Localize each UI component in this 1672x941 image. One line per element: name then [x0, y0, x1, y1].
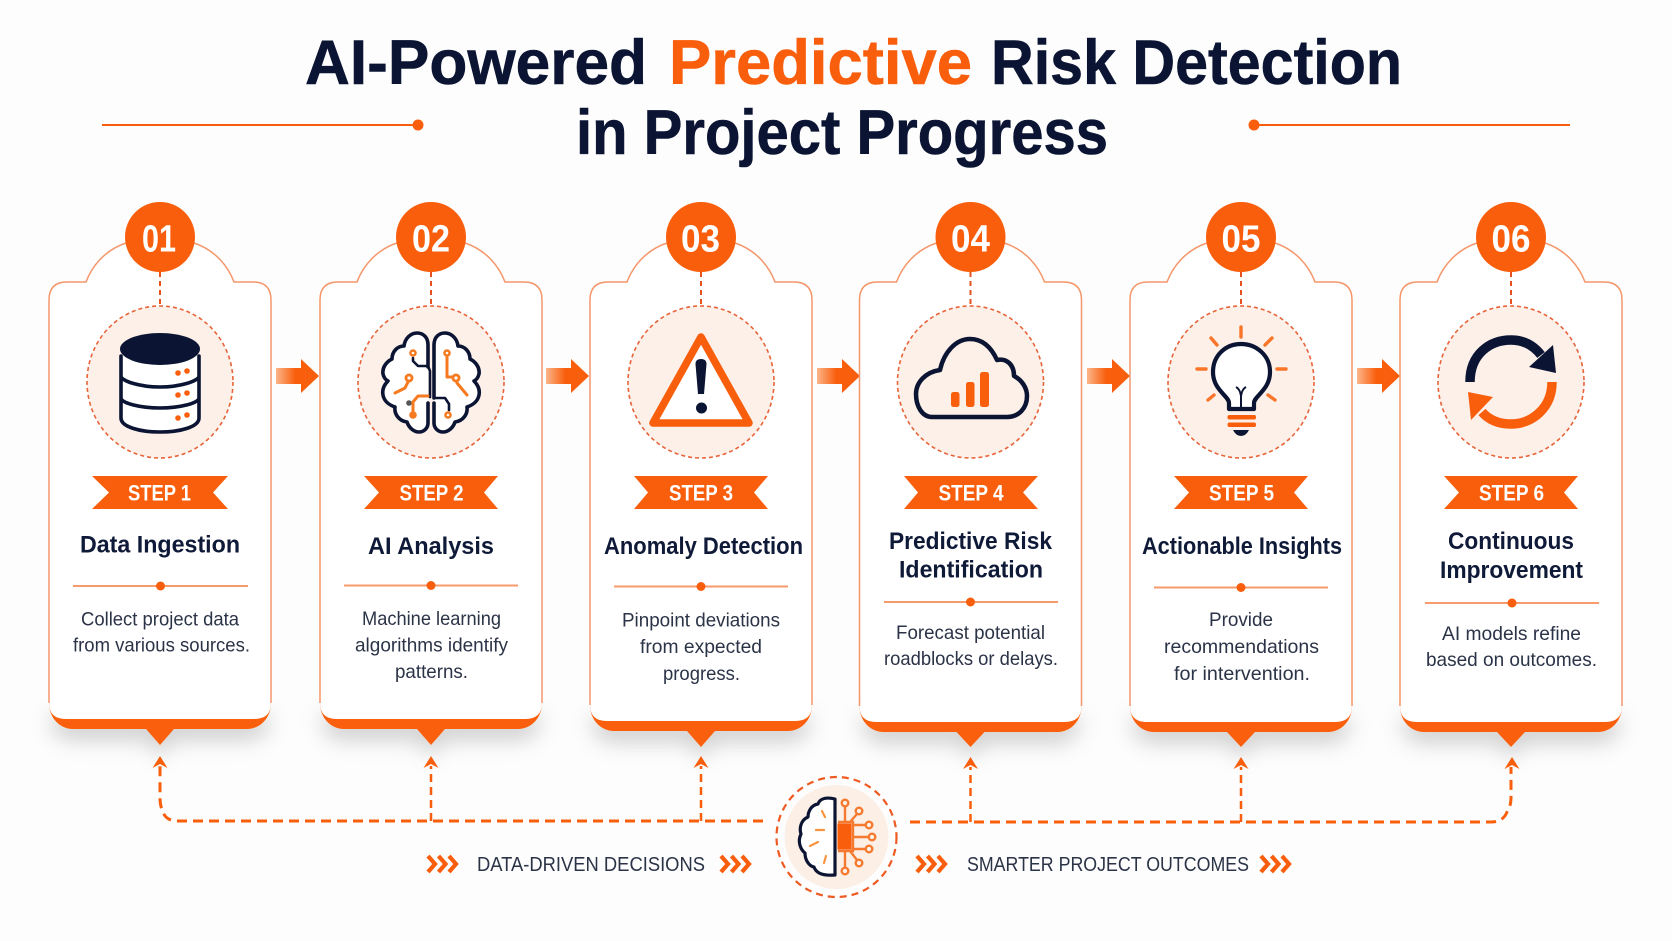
- description: [73, 608, 250, 656]
- label: smarter project outcomes: SMARTER PROJECT OUTCOMES: [967, 854, 1249, 876]
- icon: database: [87, 306, 233, 458]
- number badge 02: [396, 202, 466, 272]
- heading: Improvement: [1440, 557, 1583, 584]
- ribbon step 5: [1174, 476, 1308, 509]
- ribbon step 2: [364, 476, 498, 509]
- description: Pinpoint deviations: [622, 610, 780, 632]
- heading: [889, 528, 1052, 584]
- arrow 2 to 3: [546, 359, 589, 393]
- description: roadblocks or delays.: [884, 648, 1058, 670]
- description: progress.: [663, 663, 740, 685]
- description: [884, 622, 1058, 670]
- number badge 05: [1206, 202, 1276, 272]
- arrow 1 to 2: [276, 359, 319, 393]
- ribbon step 3: [634, 476, 768, 509]
- arrow 4 to 5: [1087, 359, 1130, 393]
- ribbon step 1: STEP 1: [128, 480, 191, 506]
- description: Forecast potential: [896, 622, 1045, 644]
- number badge 03: 03: [681, 218, 720, 260]
- ribbon step 1: [92, 476, 228, 509]
- icon: light bulb: [1168, 306, 1314, 458]
- heading: Continuous: [1448, 528, 1574, 555]
- icon: warning triangle: [628, 306, 774, 458]
- description: patterns.: [395, 661, 468, 683]
- number badge 01: [125, 202, 195, 272]
- title: [305, 28, 1402, 168]
- description: from various sources.: [73, 634, 250, 656]
- heading: Data Ingestion: [80, 532, 240, 558]
- heading: Actionable Insights: [1142, 533, 1342, 560]
- icon: brain: [358, 306, 504, 458]
- title: Predictive: [669, 28, 972, 98]
- panel: step 2 ai analysis: [320, 202, 542, 745]
- heading: AI Analysis: [368, 533, 494, 560]
- number badge 04: [936, 202, 1006, 272]
- ribbon step 4: STEP 4: [938, 480, 1004, 506]
- panel: step 4 predictive risk identification: [860, 202, 1082, 747]
- ribbon step 4: [904, 476, 1038, 509]
- description: [1426, 623, 1597, 671]
- heading: Predictive Risk: [889, 528, 1052, 555]
- description: based on outcomes.: [1426, 649, 1597, 671]
- description: from expected: [640, 636, 762, 658]
- description: AI models refine: [1442, 623, 1581, 645]
- description: Machine learning: [362, 608, 501, 630]
- number badge 01: 01: [142, 218, 176, 260]
- arrow 3 to 4: [817, 359, 860, 393]
- icon: cloud with bars: [898, 306, 1044, 458]
- panel: step 6 continuous improvement: [1400, 202, 1622, 747]
- title: AI-Powered: [305, 28, 647, 98]
- title: in Project Progress: [576, 98, 1108, 168]
- number badge 02: 02: [412, 218, 450, 260]
- title: Risk Detection: [991, 28, 1402, 98]
- heading: [1440, 528, 1583, 584]
- label: data-driven decisions: DATA-DRIVEN DECISIONS: [477, 854, 705, 876]
- number badge 03: [666, 202, 736, 272]
- ribbon step 3: STEP 3: [669, 480, 733, 506]
- arrow 5 to 6: [1357, 359, 1400, 393]
- heading: Identification: [899, 556, 1043, 584]
- description: for intervention.: [1174, 663, 1310, 685]
- icon: refresh cycle: [1438, 306, 1584, 458]
- number badge 06: 06: [1492, 218, 1530, 260]
- number badge 06: [1476, 202, 1546, 272]
- ribbon step 6: [1444, 476, 1578, 509]
- panel: step 5 actionable insights: [1130, 202, 1352, 747]
- number badge 05: 05: [1222, 218, 1260, 260]
- ribbon step 5: STEP 5: [1209, 480, 1274, 506]
- description: recommendations: [1164, 636, 1319, 658]
- icon: central AI brain and chip: [776, 777, 896, 897]
- feedback loop dashed connectors: [152, 756, 1520, 822]
- description: [622, 610, 780, 685]
- description: [1164, 609, 1319, 685]
- description: algorithms identify: [355, 634, 508, 656]
- number badge 04: 04: [951, 218, 990, 260]
- description: Provide: [1209, 609, 1273, 631]
- ribbon step 2: STEP 2: [400, 480, 464, 506]
- heading: Anomaly Detection: [604, 533, 803, 560]
- ribbon step 6: STEP 6: [1479, 480, 1544, 506]
- description: Collect project data: [81, 608, 239, 630]
- panel: step 3 anomaly detection: [590, 202, 812, 747]
- description: [355, 608, 508, 683]
- panel: step 1 data ingestion: [49, 202, 271, 745]
